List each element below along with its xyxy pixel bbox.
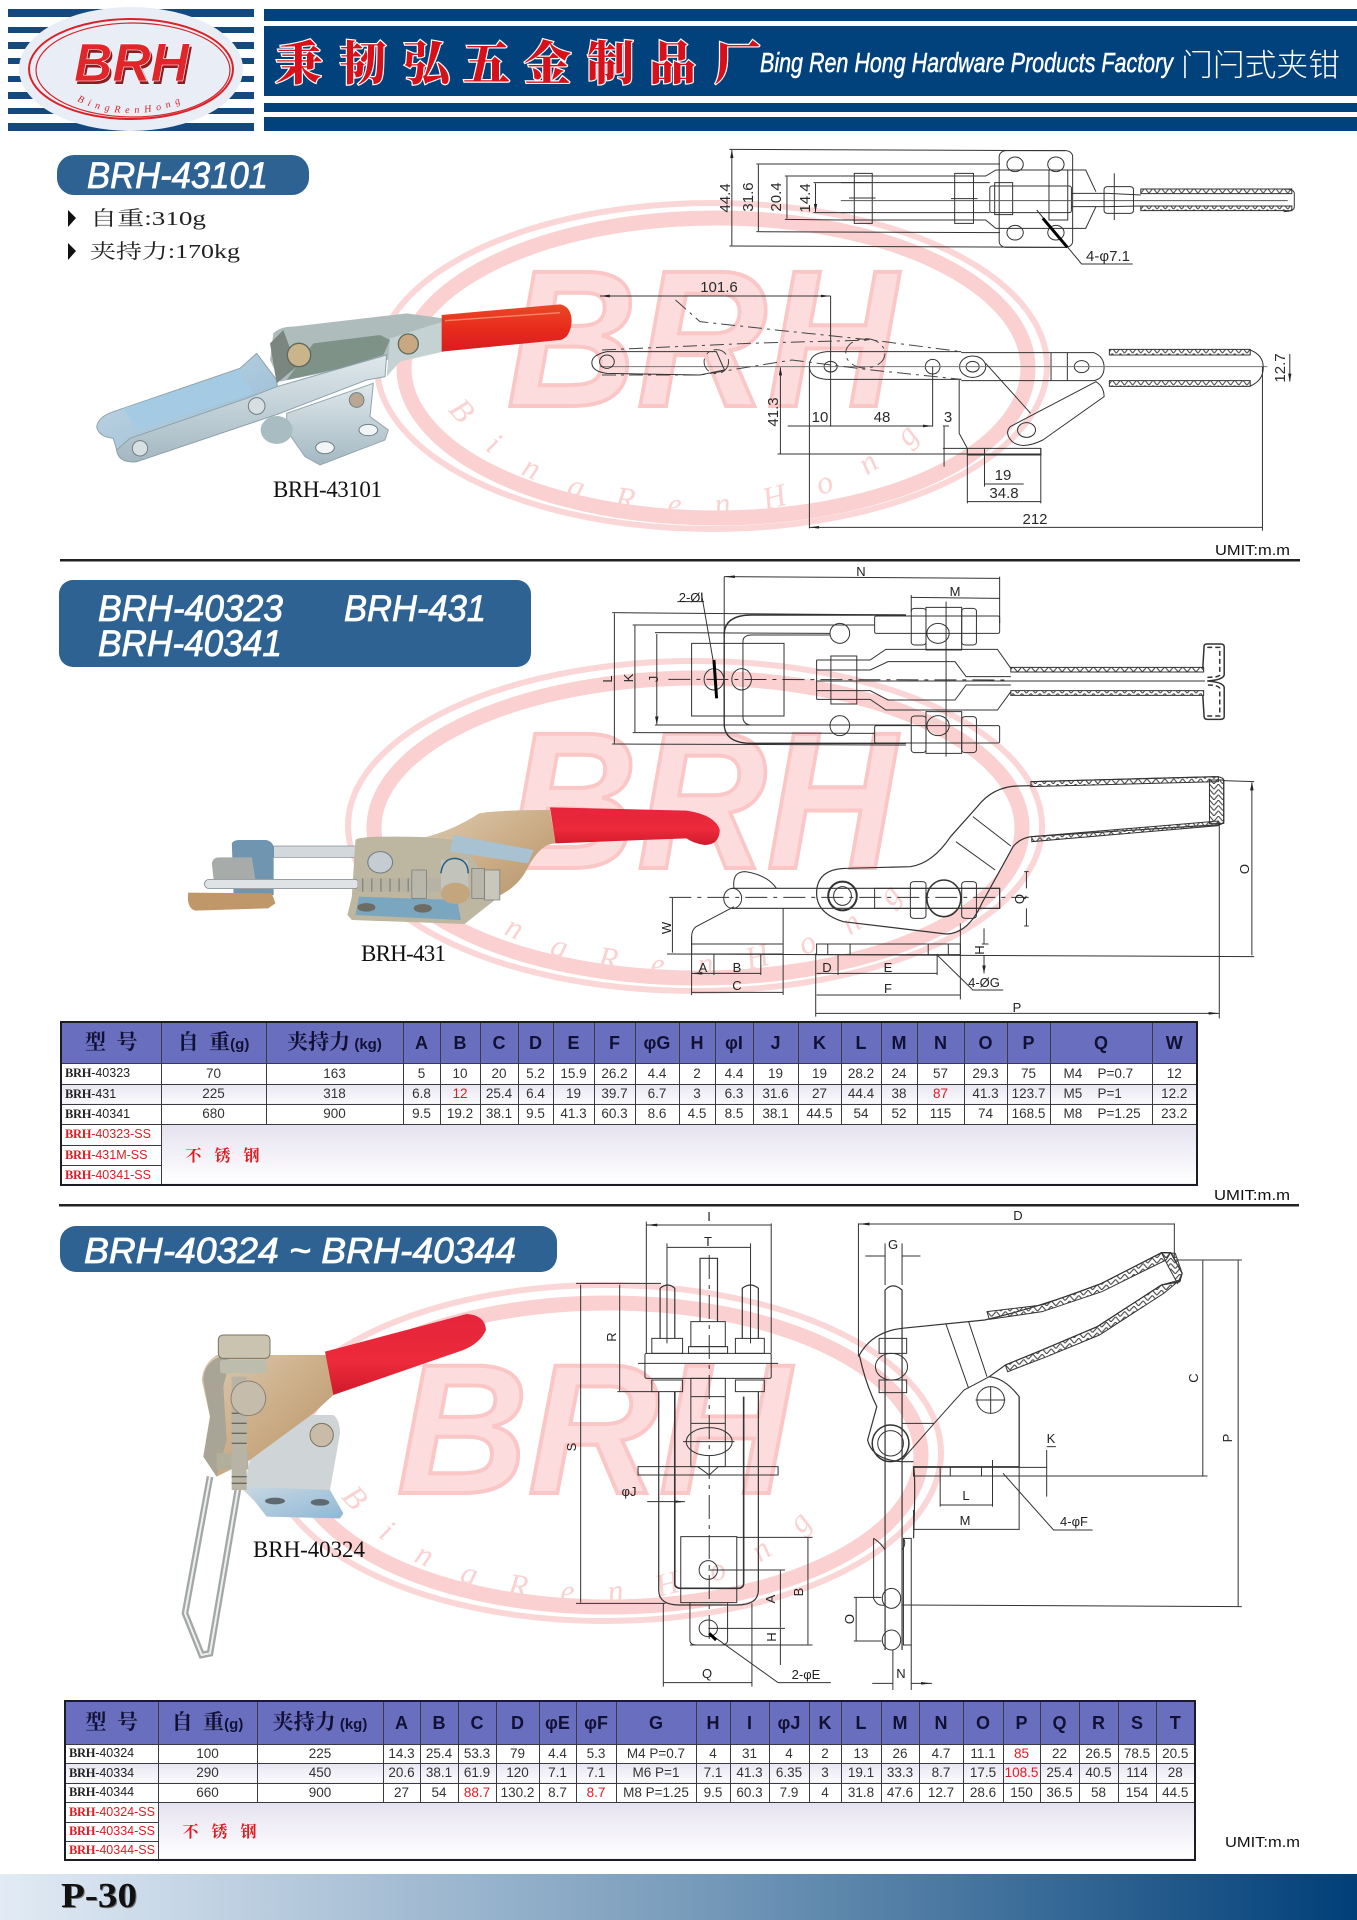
spec table: BRH-40323 / 431 / 40341: F [609, 1033, 620, 1053]
spec table: BRH-40323 / 431 / 40341: 75 [1021, 1066, 1036, 1081]
drawing dimension labels: I [707, 1209, 711, 1224]
spec table: BRH-40324 / 40334 / 40344: 4 [821, 1785, 829, 1800]
spec table: BRH-40324 / 40334 / 40344: 41.3 [736, 1765, 763, 1780]
spec table: BRH-40324 / 40334 / 40344: I [747, 1713, 752, 1733]
footer band [0, 1874, 1357, 1920]
spec table: BRH-40323 / 431 / 40341 [60, 1021, 1198, 1186]
section 1 specs: weight and clamping force: 自重:310g [90, 207, 206, 230]
header band [8, 7, 1357, 131]
spec table: BRH-40324 / 40334 / 40344: 7.1 [587, 1765, 605, 1780]
company name in English: Bing Ren Hong Hardware Products Factory [760, 47, 1175, 78]
spec table: BRH-40323 / 431 / 40341: J [770, 1033, 780, 1053]
divider: section 2 / 3 [59, 1204, 1299, 1206]
spec table: BRH-40324 / 40334 / 40344: 3 [821, 1765, 829, 1780]
drawing dimension labels: K [1047, 1431, 1056, 1446]
spec table: BRH-40323 / 431 / 40341: 25.4 [486, 1086, 512, 1101]
spec table: BRH-40323 / 431 / 40341: M8 [1064, 1106, 1082, 1121]
drawing dimension labels: A [699, 960, 708, 975]
spec table: BRH-40324 / 40334 / 40344: M8 P=1.25 [623, 1785, 689, 1800]
drawing dimension labels: Q [1012, 894, 1027, 904]
spec table: BRH-40323 / 431 / 40341: N [934, 1033, 947, 1053]
spec table: BRH-40324 / 40334 / 40344: C [470, 1713, 484, 1733]
spec table: BRH-40324 / 40334 / 40344: 33.3 [887, 1765, 913, 1780]
spec table: BRH-40324 / 40334 / 40344: 26.5 [1085, 1746, 1112, 1761]
drawing dimension labels [700, 182, 1289, 528]
spec table: BRH-40323 / 431 / 40341: 27 [812, 1086, 827, 1101]
spec table: BRH-40324 / 40334 / 40344: 120 [506, 1765, 529, 1780]
spec table: BRH-40323 / 431 / 40341: BRH-40323 [65, 1066, 130, 1080]
drawing dimension labels: J [646, 676, 661, 682]
spec table: BRH-40323 / 431 / 40341: 12 [1167, 1066, 1182, 1081]
spec table: BRH-40324 / 40334 / 40344: 26 [892, 1746, 908, 1761]
spec table: BRH-40324 / 40334 / 40344: M4 P=0.7 [627, 1746, 685, 1761]
spec table: BRH-40323 / 431 / 40341: D [529, 1033, 542, 1053]
spec table: BRH-40323 / 431 / 40341: BRH-431 [65, 1087, 116, 1101]
spec table: BRH-40323 / 431 / 40341: 29.3 [972, 1066, 999, 1081]
spec table: BRH-40323 / 431 / 40341: P=1 [1098, 1086, 1122, 1101]
drawing dimension labels [600, 564, 1252, 1015]
drawing dimension labels: 10 [812, 409, 828, 426]
drawing dimension labels: W [659, 921, 674, 934]
drawing dimension labels: T [704, 1234, 712, 1249]
company logo: BRH [74, 33, 190, 93]
spec table: BRH-40324 / 40334 / 40344 [64, 1700, 1196, 1861]
side view [817, 777, 1224, 934]
spec table: BRH-40323 / 431 / 40341: 4.4 [725, 1066, 743, 1081]
spec table: BRH-40323 / 431 / 40341: 31.6 [762, 1086, 789, 1101]
company logo: BingRenHong [77, 95, 180, 114]
spec table: BRH-40323 / 431 / 40341: 5.2 [526, 1066, 545, 1081]
spec table: BRH-40324 / 40334 / 40344: 79 [510, 1746, 525, 1761]
spec table: BRH-40323 / 431 / 40341: 318 [323, 1086, 346, 1101]
spec table: BRH-40323 / 431 / 40341: E [567, 1033, 580, 1053]
spec table: BRH-40323 / 431 / 40341: 87 [933, 1086, 948, 1101]
spec table: BRH-40324 / 40334 / 40344: 114 [1126, 1765, 1148, 1780]
spec table: BRH-40324 / 40334 / 40344: L [856, 1713, 866, 1733]
spec table: BRH-40324 / 40334 / 40344: 88.7 [464, 1785, 490, 1800]
drawing dimension labels: K [621, 673, 636, 682]
section 3 label: BRH-40324 ~ BRH-40344: BRH-40324 ~ BRH-40344 [84, 1230, 516, 1271]
spec table: BRH-40324 / 40334 / 40344: 60.3 [736, 1785, 763, 1800]
spec table: BRH-40323 / 431 / 40341: 74 [978, 1106, 993, 1121]
spec table: BRH-40323 / 431 / 40341: H [690, 1033, 704, 1053]
spec table: BRH-40324 / 40334 / 40344: φJ [778, 1713, 800, 1733]
spec table: BRH-40323 / 431 / 40341: 163 [323, 1066, 346, 1081]
spec table: BRH-40323 / 431 / 40341: 123.7 [1012, 1086, 1045, 1101]
spec table: BRH-40323 / 431 / 40341: 9.5 [412, 1106, 431, 1121]
drawing dimension labels: 44.4 [717, 183, 734, 213]
drawing dimension labels: 2-φE [792, 1667, 821, 1682]
spec table: BRH-40323 / 431 / 40341: 44.4 [848, 1086, 874, 1101]
spec table: BRH-40324 / 40334 / 40344: M [892, 1713, 908, 1733]
spec table: BRH-40324 / 40334 / 40344: 4.4 [548, 1746, 567, 1761]
spec table: BRH-40323 / 431 / 40341: 24 [891, 1066, 907, 1081]
drawing dimension labels: M [950, 584, 960, 599]
spec table: BRH-40323 / 431 / 40341: K [813, 1033, 826, 1053]
spec table: BRH-40324 / 40334 / 40344: BRH-40344 [69, 1785, 134, 1799]
spec table: BRH-40324 / 40334 / 40344: 47.6 [887, 1785, 913, 1800]
spec table: BRH-40323 / 431 / 40341: 5 [418, 1066, 425, 1081]
spec table: BRH-40323 / 431 / 40341: 9.5 [526, 1106, 545, 1121]
header stripes [264, 9, 1357, 131]
spec table: BRH-40324 / 40334 / 40344: 不锈钢 [182, 1819, 270, 1842]
section 2 label: BRH-40323 / 431 / 40341: BRH-40341 [98, 623, 282, 664]
spec table: BRH-40323 / 431 / 40341: 168.5 [1012, 1106, 1045, 1121]
spec table: BRH-40323 / 431 / 40341: 3 [693, 1086, 701, 1101]
spec table: BRH-40323 / 431 / 40341: 44.5 [806, 1106, 833, 1121]
spec table: BRH-40324 / 40334 / 40344: 27 [394, 1785, 409, 1800]
spec table: BRH-40324 / 40334 / 40344: 8.7 [548, 1785, 567, 1800]
drawing dimension labels: 14.4 [797, 183, 814, 213]
spec table: BRH-40323 / 431 / 40341: M [892, 1033, 906, 1053]
drawing dimension labels: 4-φ7.1 [1086, 248, 1130, 265]
drawing dimension labels: 12.7 [1272, 353, 1289, 383]
photo: clamp BRH-431 [188, 807, 720, 924]
drawing dimension labels: B [733, 960, 741, 975]
drawing dimension labels: L [962, 1488, 970, 1503]
spec table: BRH-40324 / 40334 / 40344: 225 [309, 1746, 331, 1761]
spec table: BRH-40323 / 431 / 40341: 41.3 [560, 1106, 587, 1121]
spec table: BRH-40324 / 40334 / 40344: 54 [431, 1785, 447, 1800]
company logo: BRH [76, 36, 192, 96]
drawing dimension labels: E [884, 960, 893, 975]
spec table: BRH-40324 / 40334 / 40344: 108.5 [1005, 1765, 1038, 1780]
photo: clamp BRH-43101 [97, 304, 572, 465]
spec table: BRH-40323 / 431 / 40341: BRH-40341-SS [65, 1168, 151, 1182]
spec table: BRH-40324 / 40334 / 40344: 7.1 [704, 1765, 722, 1780]
spec table: BRH-40324 / 40334 / 40344: H [706, 1713, 720, 1733]
spec table: BRH-40324 / 40334 / 40344: O [976, 1713, 990, 1733]
spec table: BRH-40323 / 431 / 40341: 19 [566, 1086, 581, 1101]
section 1 label: BRH-43101: BRH-43101 [87, 155, 268, 196]
spec table: BRH-40324 / 40334 / 40344: 12.7 [928, 1785, 954, 1800]
spec table: BRH-40323 / 431 / 40341: 夹持力 (kg) [287, 1030, 382, 1054]
drawing dimension labels: M [960, 1513, 970, 1528]
spec table: BRH-40323 / 431 / 40341: 4.5 [688, 1106, 706, 1121]
spec table: BRH-40324 / 40334 / 40344: 290 [196, 1765, 219, 1780]
drawing dimension labels: L [600, 675, 615, 683]
spec table: BRH-40324 / 40334 / 40344: 11.1 [970, 1746, 996, 1761]
spec table: BRH-40323 / 431 / 40341: 19.2 [447, 1106, 473, 1121]
spec table: BRH-40324 / 40334 / 40344: 8.7 [932, 1765, 950, 1780]
spec table: BRH-40323 / 431 / 40341: 60.3 [601, 1106, 628, 1121]
spec table: BRH-40323 / 431 / 40341: 12.2 [1161, 1086, 1187, 1101]
drawing dimension labels: P [1013, 1000, 1021, 1015]
drawing dimension labels: 41.3 [765, 397, 782, 427]
spec table: BRH-40324 / 40334 / 40344: 夹持力 (kg) [273, 1710, 367, 1734]
spec table: BRH-40324 / 40334 / 40344: BRH-40324-SS [69, 1805, 155, 1819]
watermark: BRH seal, section 1: BRH [507, 230, 901, 448]
drawing dimension labels: 101.6 [700, 279, 738, 296]
plan and side view linework [612, 577, 1254, 1018]
spec table: BRH-40324 / 40334 / 40344: 28.6 [970, 1785, 996, 1800]
spec table: BRH-40323 / 431 / 40341: P [1022, 1033, 1034, 1053]
watermark: BRH seal, section 2: BingRenHong [504, 886, 903, 970]
drawing dimension labels: 48 [874, 409, 890, 426]
drawing dimension labels: N [896, 1666, 906, 1681]
spec table: BRH-40323 / 431 / 40341: 52 [891, 1106, 907, 1121]
section 1 specs: weight and clamping force [68, 207, 240, 263]
unit note, section 2: UMIT:m.m [1214, 1187, 1290, 1204]
drawing dimension labels: G [888, 1237, 898, 1252]
spec table: BRH-40324 / 40334 / 40344: 25.4 [426, 1746, 452, 1761]
spec table: BRH-40324 / 40334 / 40344: 13 [853, 1746, 869, 1761]
drawing dimension labels: S [564, 1442, 579, 1451]
spec table: BRH-40324 / 40334 / 40344: 4 [785, 1746, 793, 1761]
spec table: BRH-40323 / 431 / 40341: BRH-40323-SS [65, 1127, 151, 1141]
spec table: BRH-40324 / 40334 / 40344: 14.3 [388, 1746, 415, 1761]
drawing dimension labels: 3 [944, 409, 952, 426]
spec table: BRH-40323 / 431 / 40341: 900 [323, 1106, 346, 1121]
spec table: BRH-40323 / 431 / 40341: 20 [491, 1066, 507, 1081]
watermark: BRH seal, section 1 [375, 200, 1050, 532]
watermark: BRH seal, section 3: BingRenHong [341, 1486, 813, 1600]
spec table: BRH-40323 / 431 / 40341: 2 [693, 1066, 701, 1081]
spec table: BRH-40324 / 40334 / 40344: 31.8 [848, 1785, 874, 1800]
spec table: BRH-40323 / 431 / 40341: 54 [853, 1106, 869, 1121]
spec table: BRH-40323 / 431 / 40341: 38.1 [762, 1106, 789, 1121]
spec table: BRH-40324 / 40334 / 40344: 20.5 [1162, 1746, 1188, 1761]
spec table: BRH-40324 / 40334 / 40344: 7.1 [548, 1765, 567, 1780]
company logo [8, 7, 254, 131]
spec table: BRH-40323 / 431 / 40341: Q [1094, 1033, 1108, 1053]
spec table: BRH-40324 / 40334 / 40344: 17.5 [970, 1765, 996, 1780]
spec table: BRH-40323 / 431 / 40341: 12 [452, 1086, 468, 1101]
drawing dimension labels: B [791, 1588, 806, 1596]
technical drawing: BRH-43101 [592, 149, 1294, 531]
spec table: BRH-40324 / 40334 / 40344: 85 [1014, 1746, 1029, 1761]
technical drawing: BRH-40324 / 40334 / 40344 [564, 1208, 1242, 1690]
spec table: BRH-40324 / 40334 / 40344: 型 号 [86, 1710, 138, 1734]
spec table: BRH-40324 / 40334 / 40344: 5.3 [587, 1746, 605, 1761]
spec table: BRH-40324 / 40334 / 40344: 25.4 [1046, 1765, 1073, 1780]
spec table: BRH-40324 / 40334 / 40344: 900 [309, 1785, 331, 1800]
spec table: BRH-40324 / 40334 / 40344: 7.9 [780, 1785, 798, 1800]
spec table: BRH-40324 / 40334 / 40344: 自 重(g) [172, 1710, 243, 1734]
spec table: BRH-40324 / 40334 / 40344: 40.5 [1085, 1765, 1112, 1780]
spec table: BRH-40324 / 40334 / 40344: 150 [1010, 1785, 1033, 1800]
spec table: BRH-40324 / 40334 / 40344: P [1015, 1713, 1028, 1733]
drawing dimension labels: 34.8 [989, 485, 1019, 502]
drawing dimension labels: F [884, 981, 892, 996]
drawing dimension labels: D [1013, 1208, 1023, 1223]
spec table: BRH-40324 / 40334 / 40344: 61.9 [464, 1765, 490, 1780]
spec table: BRH-40324 / 40334 / 40344: 44.5 [1162, 1785, 1188, 1800]
drawing dimension labels: 19 [995, 467, 1011, 484]
spec table: BRH-40323 / 431 / 40341: 115 [930, 1106, 951, 1121]
spec table: BRH-40324 / 40334 / 40344: 660 [196, 1785, 219, 1800]
spec table: BRH-40323 / 431 / 40341: 型 号 [85, 1030, 138, 1054]
technical drawing: BRH-40323 / 431 / 40341 [600, 564, 1254, 1018]
spec table: BRH-40323 / 431 / 40341: 225 [202, 1086, 225, 1101]
spec table: BRH-40324 / 40334 / 40344: 36.5 [1046, 1785, 1073, 1800]
spec table: BRH-40324 / 40334 / 40344: BRH-40344-SS [69, 1843, 155, 1857]
spec table: BRH-40323 / 431 / 40341: φG [644, 1033, 670, 1053]
section 1 specs: weight and clamping force: 夹持力:170kg [90, 240, 240, 263]
spec table: BRH-40323 / 431 / 40341: M4 [1064, 1066, 1082, 1081]
spec table: BRH-40324 / 40334 / 40344: 31 [742, 1746, 757, 1761]
unit note, section 1: UMIT:m.m [1215, 542, 1290, 559]
spec table: BRH-40323 / 431 / 40341: L [856, 1033, 866, 1053]
spec table: BRH-40324 / 40334 / 40344: M6 P=1 [633, 1765, 679, 1780]
footer band: P-30 [61, 1876, 137, 1915]
drawing dimension labels: N [856, 564, 866, 579]
spec table: BRH-40324 / 40334 / 40344: φF [584, 1713, 608, 1733]
spec table: BRH-40323 / 431 / 40341: 26.2 [601, 1066, 628, 1081]
spec table: BRH-40323 / 431 / 40341: BRH-431M-SS [65, 1148, 147, 1162]
spec table: BRH-40323 / 431 / 40341: M5 [1064, 1086, 1082, 1101]
page number: P-30 [62, 1877, 138, 1916]
drawing dimension labels: 4-φF [1060, 1514, 1088, 1529]
spec table: BRH-40323 / 431 / 40341: O [978, 1033, 992, 1053]
spec table: BRH-40323 / 431 / 40341: 70 [206, 1066, 221, 1081]
spec table: BRH-40323 / 431 / 40341: 38 [891, 1086, 907, 1101]
watermark: BRH seal, section 3: BRH [397, 1327, 793, 1533]
spec table: BRH-40323 / 431 / 40341: 自 重(g) [178, 1030, 249, 1054]
spec table: BRH-40324 / 40334 / 40344: 4 [709, 1746, 717, 1761]
spec table: BRH-40323 / 431 / 40341: P=0.7 [1098, 1066, 1133, 1081]
spec table: BRH-40323 / 431 / 40341: 8.6 [648, 1106, 666, 1121]
spec table: BRH-40324 / 40334 / 40344: φE [545, 1713, 570, 1733]
spec table: BRH-40323 / 431 / 40341: 23.2 [1161, 1106, 1187, 1121]
spec table: BRH-40323 / 431 / 40341: 19 [768, 1066, 783, 1081]
drawing dimension labels: φJ [622, 1484, 636, 1499]
spec table: BRH-40323 / 431 / 40341: φI [725, 1033, 743, 1053]
spec table: BRH-40323 / 431 / 40341: 680 [202, 1106, 225, 1121]
spec table: BRH-40324 / 40334 / 40344: 6.35 [776, 1765, 802, 1780]
drawing dimension labels: 4-ØG [968, 975, 1000, 990]
watermark: BRH seal, section 3 [290, 1282, 944, 1624]
company name in Chinese: 秉韧弘五金制品厂 [275, 27, 761, 94]
spec table: BRH-40324 / 40334 / 40344: BRH-40334-SS [69, 1824, 155, 1838]
drawing dimension labels: R [604, 1332, 619, 1342]
spec table: BRH-40324 / 40334 / 40344: 8.7 [587, 1785, 605, 1800]
spec table: BRH-40324 / 40334 / 40344: 38.1 [426, 1765, 452, 1780]
drawing dimension labels: D [822, 960, 832, 975]
spec table: BRH-40323 / 431 / 40341: 4.4 [648, 1066, 666, 1081]
spec table: BRH-40324 / 40334 / 40344: A [395, 1713, 408, 1733]
spec table: BRH-40323 / 431 / 40341: 38.1 [486, 1106, 512, 1121]
spec table: BRH-40324 / 40334 / 40344: K [818, 1713, 832, 1733]
drawing dimension labels: O [842, 1614, 857, 1624]
drawing dimension labels: A [763, 1594, 778, 1603]
spec table: BRH-40323 / 431 / 40341: 6.8 [412, 1086, 431, 1101]
spec table: BRH-40324 / 40334 / 40344: Q [1052, 1713, 1066, 1733]
spec table: BRH-40323 / 431 / 40341: 6.4 [526, 1086, 545, 1101]
spec table: BRH-40323 / 431 / 40341: 6.7 [648, 1086, 666, 1101]
spec table: BRH-40324 / 40334 / 40344: S [1131, 1713, 1143, 1733]
drawing dimension labels [564, 1208, 1235, 1682]
spec table: BRH-40324 / 40334 / 40344: 78.5 [1124, 1746, 1150, 1761]
spec table: BRH-40323 / 431 / 40341: B [454, 1033, 466, 1053]
spec table: BRH-40324 / 40334 / 40344: 154 [1126, 1785, 1148, 1800]
spec table: BRH-40323 / 431 / 40341: 28.2 [848, 1066, 874, 1081]
watermark: BRH seal, section 1: BingRenHong [448, 398, 920, 510]
drawing dimension labels: 31.6 [740, 182, 757, 212]
spec table: BRH-40324 / 40334 / 40344: T [1170, 1713, 1181, 1733]
spec table: BRH-40324 / 40334 / 40344: 58 [1091, 1785, 1106, 1800]
divider: section 1 / 2 [60, 559, 1300, 562]
unit note, section 3: UMIT:m.m [1225, 1834, 1300, 1851]
side view [858, 1223, 1174, 1357]
spec table: BRH-40324 / 40334 / 40344: 100 [196, 1746, 219, 1761]
spec table: BRH-40323 / 431 / 40341: 8.5 [725, 1106, 743, 1121]
spec table: BRH-40323 / 431 / 40341: 6.3 [725, 1086, 743, 1101]
spec table: BRH-40323 / 431 / 40341: 15.9 [560, 1066, 587, 1081]
photo caption: BRH-431: BRH-431 [361, 941, 446, 966]
spec table: BRH-40323 / 431 / 40341: 57 [933, 1066, 948, 1081]
spec table: BRH-40323 / 431 / 40341: 41.3 [972, 1086, 999, 1101]
spec table: BRH-40323 / 431 / 40341: P=1.25 [1098, 1106, 1141, 1121]
watermark: BRH seal, section 2: BRH [508, 692, 900, 910]
drawing dimension labels: 212 [1022, 511, 1048, 528]
spec table: BRH-40323 / 431 / 40341: 19 [812, 1066, 827, 1081]
spec table: BRH-40324 / 40334 / 40344: 4.7 [932, 1746, 950, 1761]
drawing dimension labels: 2-Øl [679, 590, 703, 605]
spec table: BRH-40323 / 431 / 40341: A [415, 1033, 428, 1053]
spec table: BRH-40324 / 40334 / 40344: 19.1 [848, 1765, 874, 1780]
drawing dimension labels: P [1220, 1434, 1235, 1442]
spec table: BRH-40324 / 40334 / 40344: 450 [309, 1765, 331, 1780]
drawing dimension labels: H [972, 945, 987, 955]
side view [809, 352, 1104, 381]
section 2 label: BRH-40323 / 431 / 40341: BRH-431 [344, 588, 486, 629]
drawing dimension labels: H [764, 1632, 779, 1642]
drawing dimension labels: C [1186, 1373, 1201, 1383]
spec table: BRH-40324 / 40334 / 40344: G [649, 1713, 663, 1733]
drawing dimension labels: Q [702, 1666, 712, 1681]
spec table: BRH-40323 / 431 / 40341: BRH-40341 [65, 1107, 130, 1121]
spec table: BRH-40324 / 40334 / 40344: 20.6 [388, 1765, 415, 1780]
spec table: BRH-40324 / 40334 / 40344: B [432, 1713, 446, 1733]
section 2 label: BRH-40323 / 431 / 40341 [59, 580, 531, 667]
spec table: BRH-40324 / 40334 / 40344: N [934, 1713, 948, 1733]
spec table: BRH-40323 / 431 / 40341: 10 [452, 1066, 468, 1081]
spec table: BRH-40324 / 40334 / 40344: R [1092, 1713, 1105, 1733]
spec table: BRH-40324 / 40334 / 40344: 9.5 [704, 1785, 722, 1800]
photo caption: BRH-40324: BRH-40324 [253, 1537, 366, 1562]
photo caption: BRH-43101: BRH-43101 [273, 477, 382, 502]
spec table: BRH-40323 / 431 / 40341: 不锈钢 [186, 1143, 273, 1166]
spec table: BRH-40323 / 431 / 40341: C [492, 1033, 506, 1053]
spec table: BRH-40324 / 40334 / 40344: 22 [1052, 1746, 1067, 1761]
section 2 label: BRH-40323 / 431 / 40341: BRH-40323 [98, 588, 283, 629]
spec table: BRH-40324 / 40334 / 40344: BRH-40324 [69, 1746, 134, 1760]
spec table: BRH-40324 / 40334 / 40344: D [511, 1713, 524, 1733]
photo: clamp BRH-40324 [185, 1314, 486, 1655]
drawing dimension labels: O [1237, 864, 1252, 874]
spec table: BRH-40324 / 40334 / 40344: BRH-40334 [69, 1766, 134, 1780]
spec table: BRH-40323 / 431 / 40341: W [1166, 1033, 1183, 1053]
drawing dimension labels: C [732, 978, 742, 993]
spec table: BRH-40323 / 431 / 40341: 39.7 [601, 1086, 628, 1101]
spec table: BRH-40324 / 40334 / 40344: 53.3 [464, 1746, 490, 1761]
spec table: BRH-40324 / 40334 / 40344: 130.2 [501, 1785, 534, 1800]
front and side view linework [576, 1222, 1242, 1690]
watermark: BRH seal, section 2 [345, 658, 1045, 994]
spec table: BRH-40324 / 40334 / 40344: 2 [821, 1746, 829, 1761]
product category: 门闩式夹钳 [1181, 40, 1340, 85]
top view and side view linework [592, 149, 1294, 531]
spec table: BRH-40324 / 40334 / 40344: 28 [1168, 1765, 1183, 1780]
drawing dimension labels: 20.4 [768, 182, 785, 212]
